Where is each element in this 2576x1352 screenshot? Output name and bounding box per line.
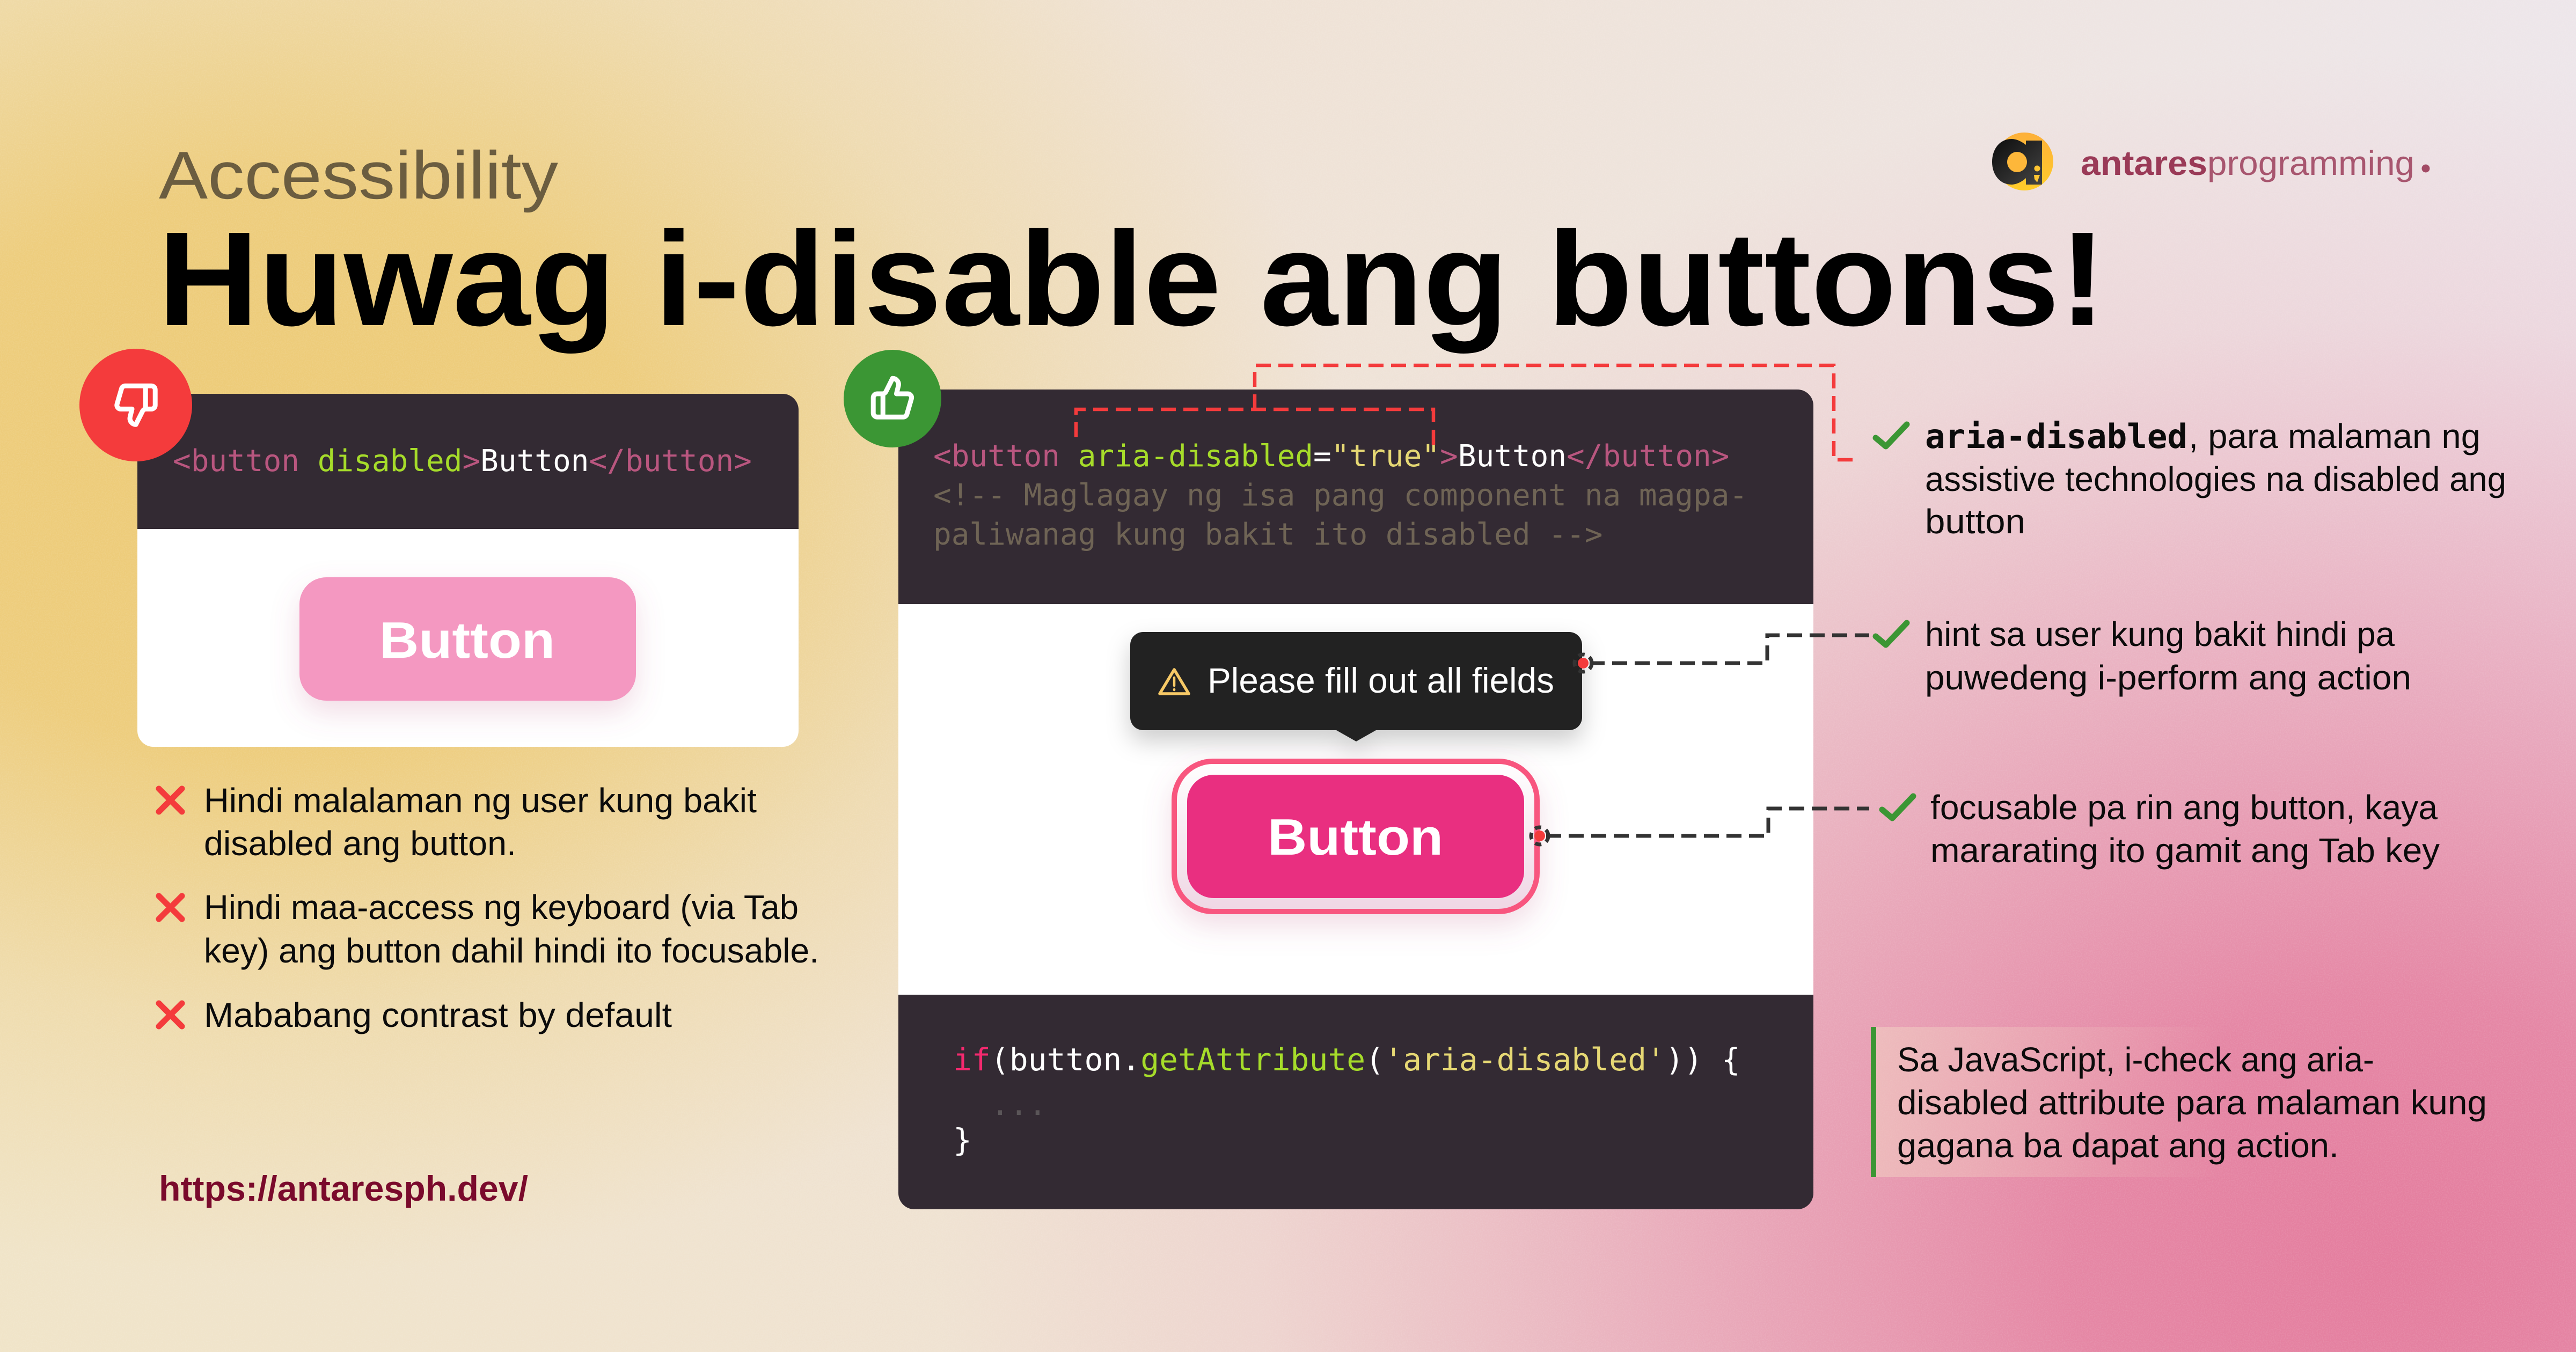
top code block: <!-- Maglagay ng isa pang component na magpa-: [933, 478, 1747, 513]
annotation: aria-disabled: aria-disabled: [1925, 417, 2187, 456]
item 2: Hindi maa-access ng keyboard (via Tab: [204, 888, 799, 927]
tooltip: Please fill out all fields: [1208, 660, 1554, 700]
connector: button annotation: [1531, 809, 1869, 844]
panel: disabled button example: [137, 394, 799, 747]
item 2: key) ang button dahil hindi ito focusable.: [204, 931, 819, 970]
link: website url: https://antaresph.dev/: [159, 1169, 528, 1208]
callout: JavaScript note: Sa JavaScript, i-check ang aria-: [1897, 1040, 2374, 1079]
callout: JavaScript note: gagana ba dapat ang action.: [1897, 1126, 2339, 1165]
annotation: aria-disabled: button: [1925, 502, 2025, 541]
panel: aria-disabled example: [898, 390, 1813, 1209]
logo: antaresprogramming: [1992, 133, 2430, 190]
eyebrow: Accessibility: Accessibility: [159, 137, 558, 213]
annotation: focusable: focusable pa rin ang button, kaya: [1930, 788, 2438, 827]
item 3: Mababang contrast by default: [204, 996, 672, 1034]
annotation: aria-disabled: assistive technologies na disabled ang: [1925, 460, 2506, 498]
annotation: hint: [1876, 615, 2411, 697]
focused button: Button: [1268, 809, 1443, 866]
title: Huwag i-disable ang buttons!: [158, 204, 2106, 354]
annotation: hint: puwedeng i-perform ang action: [1925, 658, 2411, 697]
item 2: [159, 888, 819, 970]
focused button: [1174, 761, 1537, 912]
annotation: aria-disabled: , para malaman ng: [2189, 417, 2480, 455]
callout: JavaScript note: disabled attribute para malaman kung: [1897, 1083, 2487, 1122]
tooltip: [1130, 632, 1582, 741]
bottom code block: [898, 995, 1813, 1209]
disabled button: [299, 577, 636, 701]
logo: antaresprogramming: programming: [2207, 144, 2414, 182]
disabled button: Button: [379, 612, 555, 669]
annotation: aria-disabled: [1876, 417, 2506, 541]
item 1: [159, 781, 757, 863]
list: disadvantages: [159, 781, 819, 1034]
wordmark: antares: [2081, 144, 2207, 182]
icon: thumbs up badge: [844, 350, 941, 447]
bottom code block: }: [953, 1122, 972, 1158]
code line: <button disabled>Button</button>: [173, 444, 752, 479]
annotation: focusable: [1882, 788, 2440, 870]
panel white body: [137, 515, 799, 747]
annotation: focusable: mararating ito gamit ang Tab key: [1930, 831, 2440, 870]
logo mark: [1992, 133, 2053, 190]
callout: JavaScript note: [1871, 1027, 2487, 1177]
bottom code block: if(button.getAttribute('aria-disabled')) {: [953, 1041, 1740, 1078]
icon: thumbs down badge: [79, 349, 192, 461]
item 1: disabled ang button.: [204, 824, 516, 863]
code header: [137, 394, 799, 529]
annotation: hint: hint sa user kung bakit hindi pa: [1925, 615, 2395, 653]
connector: tooltip annotation: [1575, 635, 1869, 672]
top code block: paliwanag kung bakit ito disabled -->: [933, 517, 1602, 552]
top code block: [898, 390, 1813, 604]
item 1: Hindi malalaman ng user kung bakit: [204, 781, 757, 820]
connector: aria-disabled annotation: [1076, 365, 1858, 460]
panel white body: [898, 590, 1813, 1009]
top code block: <button aria-disabled="true">Button</button>: [933, 439, 1729, 474]
bottom code block: ...: [991, 1086, 1047, 1122]
icon: warning: [1160, 670, 1189, 694]
